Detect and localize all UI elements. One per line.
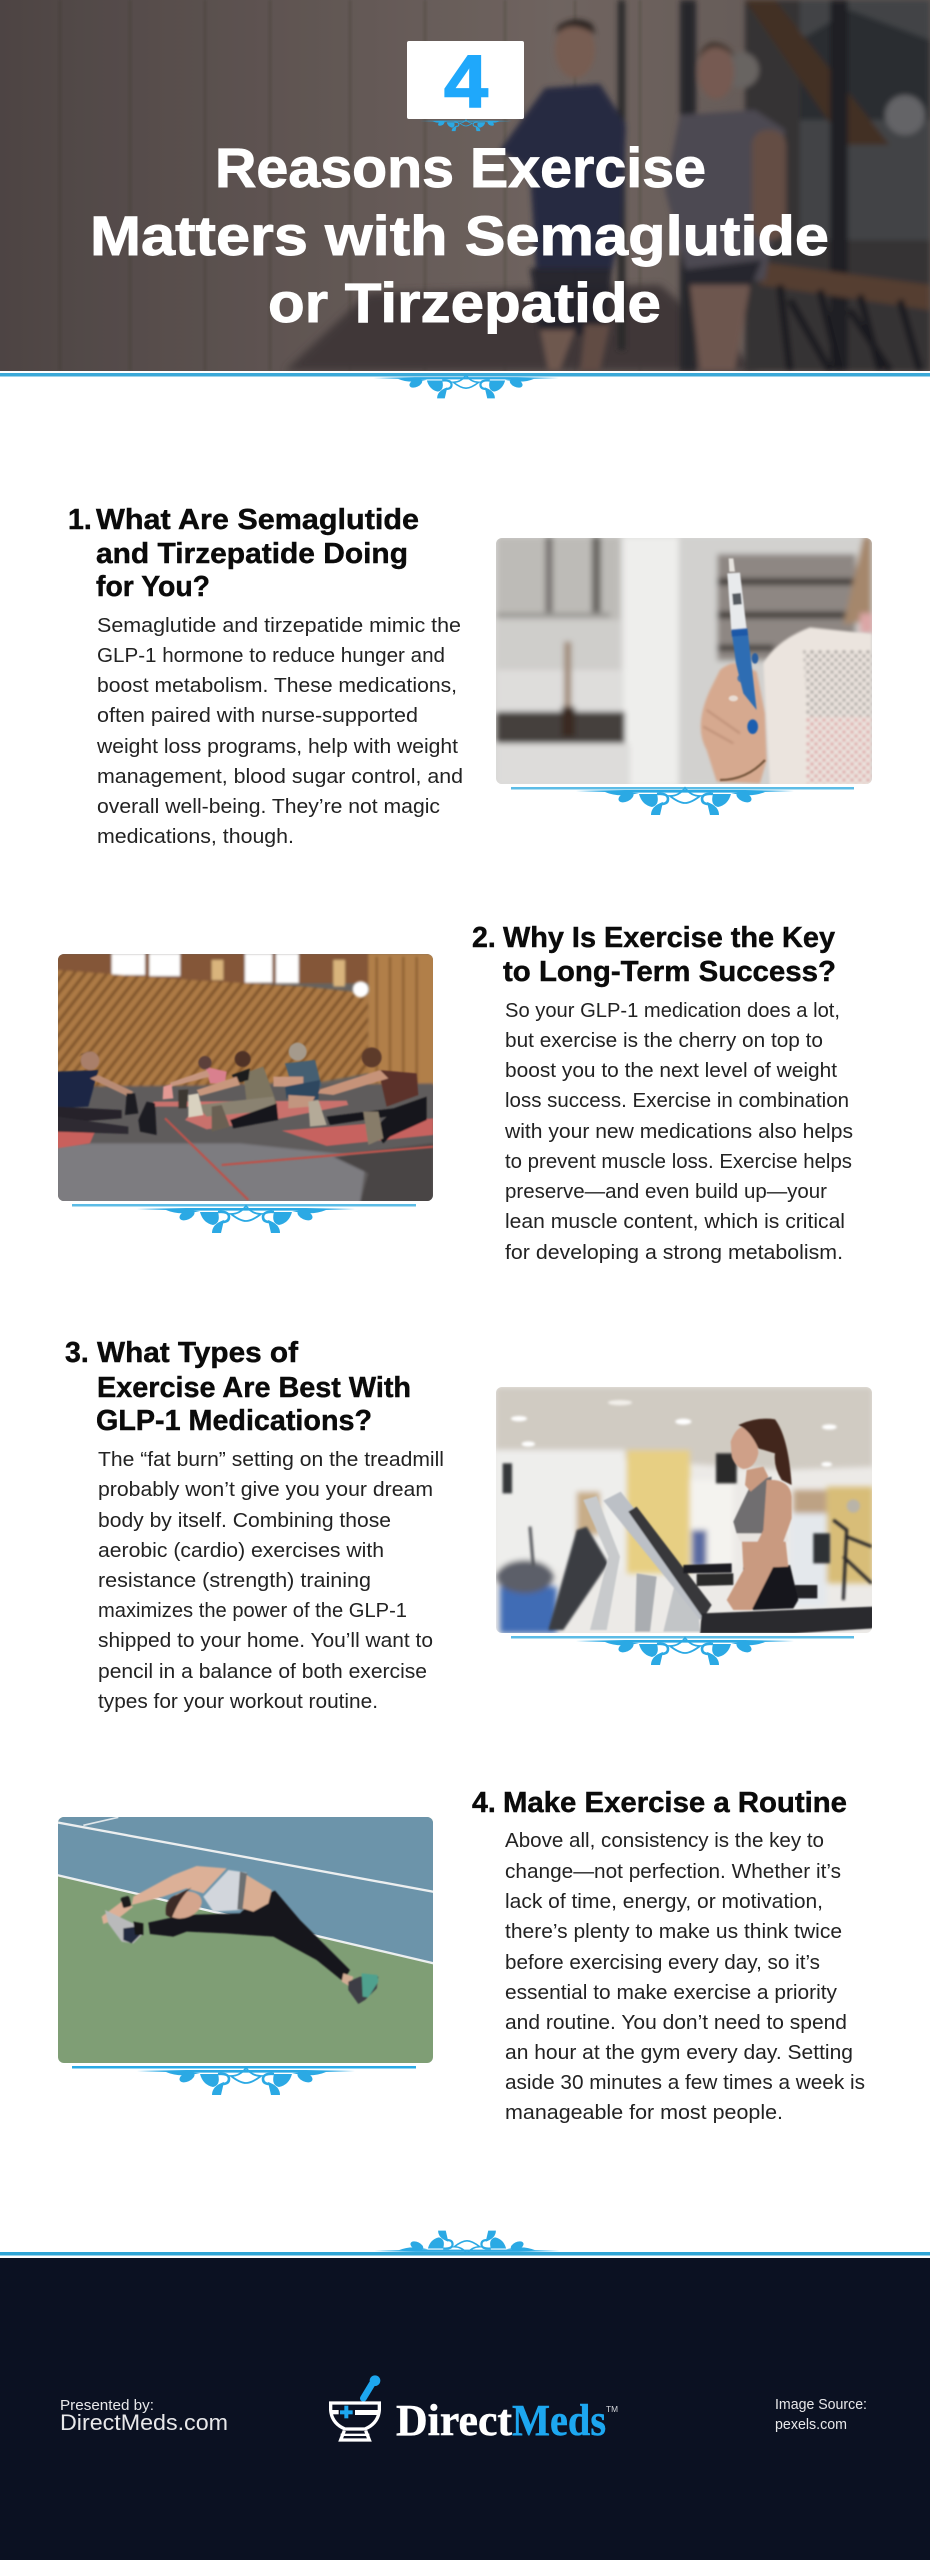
ornament <box>576 788 794 815</box>
body 3: types for your workout routine. <box>98 1690 378 1713</box>
heading 2: 2. <box>472 922 496 954</box>
body 1: boost metabolism. These medications, <box>97 674 457 697</box>
heading 1: and Tirzepatide Doing <box>96 538 408 570</box>
body 1: medications, though. <box>97 825 294 848</box>
heading 3: What Types of <box>97 1337 299 1369</box>
heading 2: Why Is Exercise the Key <box>503 922 835 954</box>
body 3 <box>98 1448 444 1713</box>
section 4 <box>40 1787 865 2124</box>
body 2: but exercise is the cherry on top to <box>505 1029 823 1052</box>
body 2: to prevent muscle loss. Exercise helps <box>505 1150 852 1173</box>
body 4: an hour at the gym every day. Setting <box>505 2041 853 2064</box>
body 1: management, blood sugar control, and <box>97 765 463 788</box>
image source: pexels.com <box>775 2416 847 2433</box>
section 3 <box>65 1337 880 1713</box>
heading 3: Exercise Are Best With <box>97 1372 411 1404</box>
title: Reasons Exercise <box>215 136 706 199</box>
footer ornament <box>374 2231 560 2254</box>
body 4: Above all, consistency is the key to <box>505 1829 824 1852</box>
body 3: shipped to your home. You’ll want to <box>98 1629 433 1652</box>
photo: woman stretching on court <box>58 1817 433 2063</box>
body 3: body by itself. Combining those <box>98 1509 391 1532</box>
header photo: runners <box>0 0 930 371</box>
photo: hand holding injection pen <box>496 538 872 784</box>
body 2 <box>504 999 853 1264</box>
photo rule <box>72 1204 416 1206</box>
photo rule <box>511 1636 854 1638</box>
heading 2: to Long-Term Success? <box>503 956 836 988</box>
body 2: boost you to the next level of weight <box>505 1059 837 1082</box>
presented by: Presented by: <box>60 2397 154 2414</box>
title: Matters with Semaglutide <box>90 204 829 267</box>
title <box>90 136 829 334</box>
body 1 <box>96 614 463 848</box>
body 4: change—not perfection. Whether it’s <box>505 1860 841 1883</box>
heading 2 <box>472 922 836 988</box>
number badge <box>407 40 524 131</box>
body 1: weight loss programs, help with weight <box>96 735 458 758</box>
body 1: often paired with nurse-supported <box>97 704 418 727</box>
heading 1: What Are Semaglutide <box>96 504 419 536</box>
body 2: loss success. Exercise in combination <box>505 1089 849 1112</box>
body 4: manageable for most people. <box>505 2101 783 2124</box>
body 4: aside 30 minutes a few times a week is <box>505 2071 865 2094</box>
header rule <box>0 373 930 376</box>
body 2: for developing a strong metabolism. <box>505 1241 843 1264</box>
wordmark: Meds <box>512 2396 606 2445</box>
body 3: pencil in a balance of both exercise <box>98 1660 427 1683</box>
body 1: Semaglutide and tirzepatide mimic the <box>97 614 461 637</box>
body 1: overall well-being. They’re not magic <box>97 795 440 818</box>
number badge: 4 <box>444 40 488 123</box>
heading 3: 3. <box>65 1337 89 1369</box>
body 2: So your GLP-1 medication does a lot, <box>505 999 840 1022</box>
body 2: lean muscle content, which is critical <box>505 1210 845 1233</box>
body 2: preserve—and even build up—your <box>505 1180 827 1203</box>
wordmark: Direct <box>396 2396 512 2445</box>
photo rule <box>72 2066 416 2068</box>
photo: woman on treadmill <box>496 1387 872 1633</box>
heading 3 <box>65 1337 411 1437</box>
body 4: and routine. You don’t need to spend <box>505 2011 847 2034</box>
header ornament <box>373 375 559 398</box>
section 1 <box>68 504 880 848</box>
wordmark <box>396 2396 618 2445</box>
body 3: aerobic (cardio) exercises with <box>98 1539 384 1562</box>
runner left <box>555 22 595 78</box>
logo <box>330 2375 618 2445</box>
section 2 <box>40 922 853 1264</box>
body 3: resistance (strength) training <box>98 1569 371 1592</box>
person 5 <box>362 1047 382 1067</box>
runner right <box>698 45 734 99</box>
image source: Image Source: <box>775 2396 867 2413</box>
wordmark: TM <box>606 2405 618 2414</box>
heading 1: for You? <box>96 571 210 603</box>
body 4 <box>505 1829 865 2124</box>
footer panel <box>0 2258 930 2560</box>
heading 1: 1. <box>68 504 92 536</box>
body 3: The “fat burn” setting on the treadmill <box>98 1448 444 1471</box>
body 3: maximizes the power of the GLP-1 <box>98 1599 407 1622</box>
body 1: GLP-1 hormone to reduce hunger and <box>97 644 445 667</box>
person 1 <box>57 1070 98 1108</box>
image source <box>775 2396 867 2433</box>
body 3: probably won’t give you your dream <box>98 1478 433 1501</box>
title: or Tirzepatide <box>268 271 661 334</box>
footer rule <box>0 2252 930 2256</box>
ornament <box>137 2068 355 2095</box>
body 2: with your new medications also helps <box>504 1120 853 1143</box>
body 4: there’s plenty to make us think twice <box>505 1920 842 1943</box>
photo rule <box>511 787 854 790</box>
ornament <box>576 1638 794 1665</box>
photo: group stretching <box>58 954 433 1201</box>
ornament <box>137 1206 355 1233</box>
person 4 <box>289 1043 307 1061</box>
person 3 <box>243 1067 277 1103</box>
person 2 <box>205 1067 227 1083</box>
presented by <box>60 2397 228 2435</box>
heading 4: 4. <box>472 1787 496 1819</box>
heading 4: Make Exercise a Routine <box>503 1787 847 1819</box>
body 4: essential to make exercise a priority <box>505 1981 838 2004</box>
icon: mortar and pestle <box>330 2375 380 2440</box>
presented by: DirectMeds.com <box>60 2410 228 2435</box>
heading 3: GLP-1 Medications? <box>96 1405 372 1437</box>
heading 1 <box>68 504 419 603</box>
body 4: lack of time, energy, or motivation, <box>505 1890 823 1913</box>
body 4: before exercising every day, so it’s <box>505 1951 820 1974</box>
woman <box>743 1565 798 1610</box>
